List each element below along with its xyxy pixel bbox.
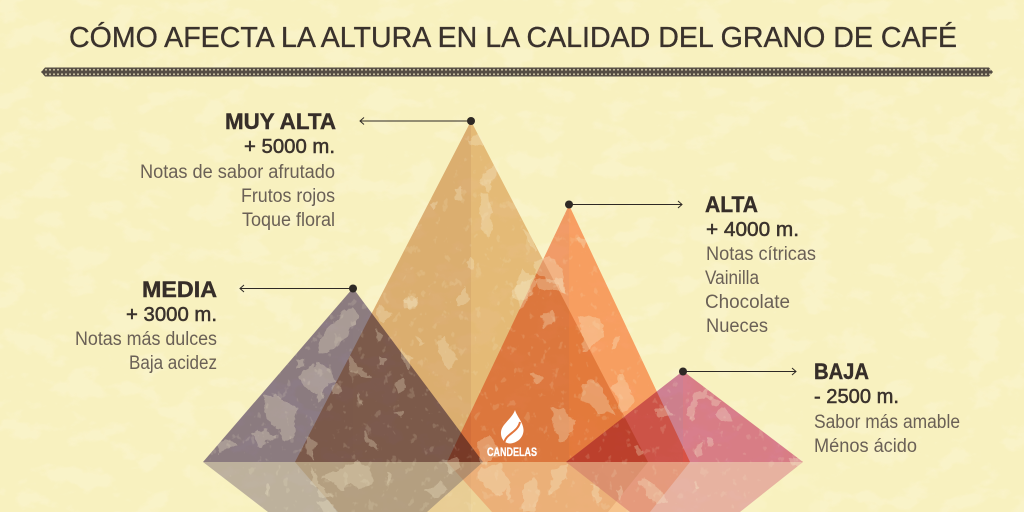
- altitude: 5000: + 5000 m.: [244, 136, 335, 158]
- arrow: media: [240, 284, 357, 292]
- logo: candelas: [487, 410, 537, 459]
- notes: media: Baja acidez: [129, 353, 217, 374]
- fine speckle texture on mountains: [210, 136, 798, 512]
- heading: baja: BAJA: [814, 359, 869, 384]
- altitude: 4000: + 4000 m.: [706, 219, 799, 241]
- reflection: baja: [566, 462, 803, 512]
- callout: media: [75, 277, 357, 374]
- reflection: media: [203, 462, 483, 512]
- notes: muy alta: [140, 162, 335, 231]
- icon: flame: [501, 410, 524, 444]
- notes: muy alta: Frutos rojos: [241, 186, 335, 207]
- notes: alta: Notas cítricas: [706, 244, 816, 265]
- mountain: muy alta: [295, 121, 648, 462]
- notes: baja: Sabor más amable: [814, 412, 960, 433]
- arrow: muy alta: [360, 117, 475, 125]
- notes: alta: [705, 244, 816, 337]
- callout: baja: [679, 359, 960, 457]
- notes: alta: Chocolate: [705, 292, 790, 313]
- mountain: media: [203, 288, 483, 462]
- notes: alta: Vainilla: [705, 268, 759, 289]
- reflection: muy alta: [295, 462, 648, 512]
- notes: baja: Ménos ácido: [814, 436, 917, 457]
- title ribbon divider: [41, 68, 993, 76]
- heading: alta: ALTA: [705, 192, 758, 217]
- notes: muy alta: Toque floral: [242, 210, 335, 231]
- blotches: left mountains: [217, 297, 460, 512]
- logo wordmark: CANDELAS: [487, 447, 537, 459]
- callout: alta: [565, 192, 816, 337]
- notes: muy alta: Notas de sabor afrutado: [140, 162, 335, 183]
- reflection fade overlay: [190, 462, 820, 512]
- title: CÓMO AFECTA LA ALTURA EN LA CALIDAD DEL GRANO DE CAFÉ: [69, 21, 957, 54]
- arrow: baja: [679, 368, 796, 376]
- blotches: peak mountains: [405, 137, 587, 310]
- arrow: alta: [565, 200, 682, 208]
- callout: muy alta: [140, 109, 475, 231]
- blotches: right mountains: [480, 280, 800, 512]
- mountain: alta: [447, 205, 690, 462]
- altitude: 2500: - 2500 m.: [814, 386, 899, 408]
- notes: media: [75, 329, 217, 374]
- mountains chart: [190, 110, 820, 512]
- altitude: 3000: + 3000 m.: [126, 304, 217, 326]
- notes: baja: [814, 412, 960, 457]
- mountain: baja: [566, 371, 803, 462]
- reflection: alta: [447, 462, 690, 512]
- heading: media: MEDIA: [142, 277, 217, 302]
- heading: muy alta: MUY ALTA: [225, 109, 336, 134]
- notes: media: Notas más dulces: [75, 329, 217, 350]
- notes: alta: Nueces: [706, 316, 768, 337]
